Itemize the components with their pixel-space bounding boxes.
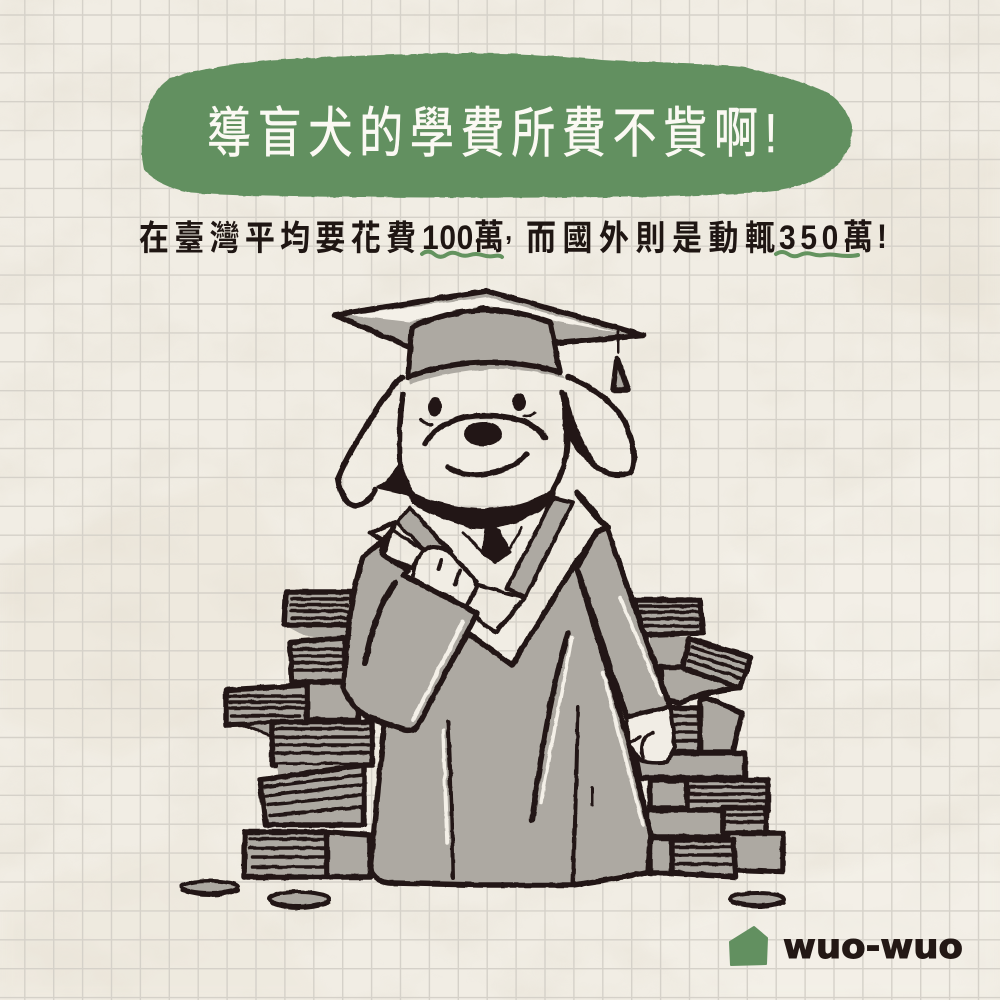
comma: ,	[505, 216, 512, 246]
collar line left	[410, 508, 477, 582]
right ear	[565, 377, 634, 475]
scroll left end	[382, 530, 423, 568]
fist holding scroll	[413, 547, 477, 605]
exclamation: !	[877, 217, 887, 255]
amount 100萬: 100萬	[422, 218, 504, 256]
house icon	[730, 927, 767, 965]
ear shadow right	[565, 395, 596, 466]
cuff highlight	[413, 622, 463, 720]
money stacks left	[226, 592, 372, 877]
brand name: wuo-wuo	[783, 927, 963, 967]
coins	[182, 881, 784, 908]
title text: 導盲犬的學費所費不貲啊!	[207, 102, 777, 164]
green wavy underline right	[776, 252, 858, 256]
title banner	[142, 53, 852, 198]
right eye	[512, 393, 526, 411]
shirt collar lines	[463, 527, 522, 552]
coin middle	[269, 892, 329, 908]
green wavy underline left	[422, 252, 502, 257]
tie	[483, 526, 510, 563]
left eye	[428, 397, 442, 417]
tassel	[613, 358, 628, 390]
illustration: graduate dog on money	[182, 291, 784, 908]
coin right	[730, 893, 784, 906]
stole band right	[507, 498, 573, 597]
shoulder flap	[370, 522, 395, 541]
coin left	[182, 881, 238, 894]
brand logo	[730, 927, 963, 967]
lashes	[421, 413, 535, 424]
cap grey shadow	[408, 363, 565, 384]
subtitle part 2: 而國外則是動輒	[526, 219, 775, 257]
sleeve	[343, 541, 477, 730]
scroll right end	[472, 585, 525, 632]
nose	[464, 422, 502, 446]
muzzle	[425, 416, 545, 444]
V lower edge	[468, 528, 607, 665]
gown body	[370, 567, 651, 885]
face	[399, 392, 567, 495]
right hand	[627, 707, 675, 763]
amount 350萬: 350萬	[779, 218, 873, 256]
cap body	[408, 310, 560, 377]
collar outer right	[577, 493, 607, 528]
left ear	[338, 377, 402, 506]
subtitle	[139, 216, 887, 257]
graduation cap	[334, 291, 643, 390]
tassel cord	[616, 332, 620, 352]
gown right arm	[577, 528, 670, 717]
stole band left	[397, 508, 452, 552]
gown fold lines	[448, 633, 592, 882]
green banner shape	[142, 53, 852, 198]
money stacks right	[635, 600, 783, 877]
dark neck	[410, 488, 555, 528]
cap board	[334, 291, 643, 347]
subtitle part 1: 在臺灣平均要花費	[139, 219, 416, 257]
scroll	[382, 528, 607, 665]
shirt and tie	[410, 488, 555, 563]
arm highlights	[443, 597, 661, 843]
sleeve fold	[365, 583, 395, 663]
ear shadow left	[378, 462, 412, 495]
cap top highlight	[350, 297, 620, 333]
smile	[448, 454, 527, 475]
